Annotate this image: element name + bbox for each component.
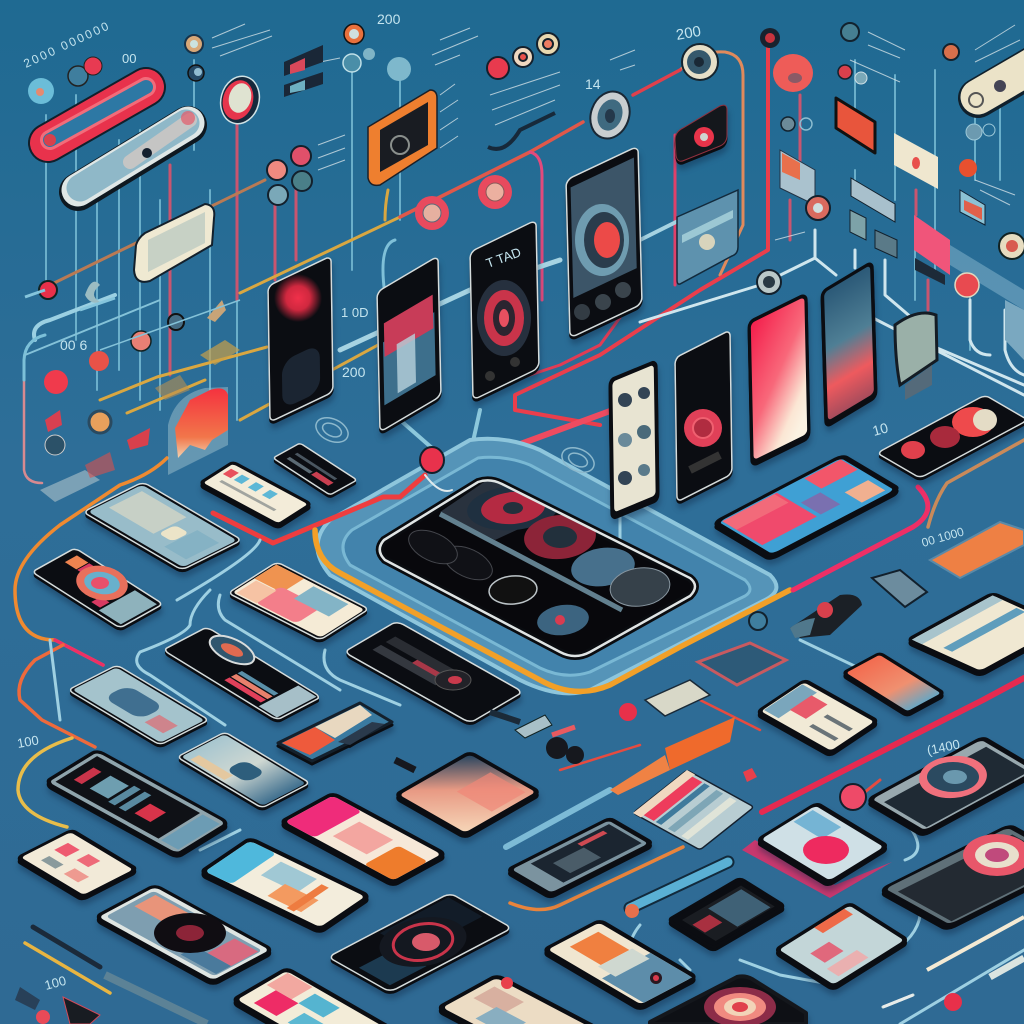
pin: red marker bbox=[420, 447, 444, 473]
icon: dark dot and red badge bbox=[760, 28, 813, 92]
flat phone: pink tiles bbox=[280, 793, 446, 883]
icon: red tablet bbox=[836, 98, 875, 153]
flat phone: black ring bbox=[328, 893, 512, 992]
icon: top-left dials bbox=[28, 35, 204, 104]
number labels: 14 bbox=[585, 76, 601, 92]
main orange line bbox=[15, 458, 167, 665]
pin: lower right dot bbox=[840, 784, 866, 810]
main tablet bbox=[380, 478, 695, 656]
flat phone: pale tablet bbox=[775, 903, 908, 987]
icon: small gadgets right bbox=[780, 150, 1024, 360]
pink halo under tablet bbox=[742, 840, 892, 898]
flat phone: right big ring upper bbox=[867, 737, 1024, 833]
orange ribbon right bbox=[930, 522, 1024, 578]
icon: stacked thumbnails bbox=[284, 45, 323, 97]
phone: upright black red ring bbox=[675, 330, 732, 502]
icon: red orange flame card bbox=[168, 387, 228, 475]
number labels: 200 bbox=[675, 23, 702, 44]
number labels: 00 6 bbox=[60, 337, 87, 353]
flat phone: gray list bbox=[83, 482, 242, 570]
icon: outline marks bbox=[312, 413, 598, 477]
icon: orange device bbox=[368, 90, 437, 185]
number labels: 200 bbox=[377, 11, 401, 27]
icon: cluster of four dots bbox=[267, 146, 312, 205]
icon: cream note bbox=[894, 133, 938, 189]
icon: top dots bbox=[343, 24, 411, 81]
red-framed screen small bbox=[698, 643, 786, 685]
flat phone: cream notes bbox=[200, 462, 311, 525]
heading: top left caption: 2000 000000 bbox=[21, 18, 113, 71]
icon: cream pill top right bbox=[969, 61, 1024, 107]
bottom stylus and pins bbox=[15, 904, 1024, 1024]
number labels: 10 bbox=[871, 419, 890, 439]
number labels: 1 0D bbox=[341, 305, 368, 320]
flat phone: black small center bbox=[668, 878, 785, 948]
icon: ring top of phones bbox=[757, 270, 781, 294]
flat phone: black lens bbox=[32, 548, 163, 628]
flat phone: black red lines bbox=[163, 627, 321, 720]
pale card small bbox=[645, 680, 710, 716]
phone: upright gray red bbox=[822, 262, 876, 424]
icon: smartwatch bbox=[895, 313, 937, 400]
icon: top ring bbox=[682, 44, 718, 80]
flat phone: black bottom rings bbox=[650, 976, 806, 1024]
icon: ring dial bbox=[584, 86, 636, 144]
number labels: 00 bbox=[122, 51, 136, 66]
number labels: 100 bbox=[43, 973, 68, 993]
icon: gray pill bbox=[78, 111, 195, 192]
flat phone: pink bottom bbox=[232, 968, 400, 1024]
flat phone: cream blue orange bbox=[200, 838, 370, 930]
flat phone: cream bottom bbox=[437, 975, 615, 1024]
flat phone: pink blob bbox=[757, 803, 888, 883]
icon: phone cable plug bbox=[490, 712, 520, 722]
flat phone: orange red bbox=[843, 653, 944, 713]
flat phone: black small bbox=[273, 443, 357, 495]
flat phone: cream document bbox=[757, 680, 878, 753]
flat phone: cream red bbox=[17, 830, 137, 897]
icon: left mid gadgets bbox=[25, 281, 240, 502]
flat phone: black long list bbox=[45, 750, 229, 855]
flat phone: multicolor bbox=[713, 455, 900, 557]
flat phone: dark street bbox=[507, 818, 653, 895]
icon: red pill bbox=[44, 87, 146, 146]
phone: upright waves bbox=[377, 256, 441, 432]
flat phone: orange gradient bbox=[228, 562, 369, 640]
flat phone: orange table bbox=[395, 752, 540, 835]
icon: cream card bbox=[134, 204, 214, 282]
flat phone: cream widgets bbox=[907, 593, 1024, 673]
platform under tablet bbox=[318, 439, 776, 693]
flat phone: right big ring lower bbox=[880, 825, 1024, 927]
flat phone: gray illustration bbox=[68, 665, 209, 745]
phone: upright app list bbox=[610, 361, 658, 516]
icon: row of dots top centre bbox=[487, 33, 559, 79]
icon: red swirl badges bbox=[415, 175, 512, 230]
phone: upright big lens bbox=[566, 146, 642, 338]
number labels: 200 bbox=[342, 364, 366, 380]
orange ribbon centre bbox=[610, 717, 735, 795]
phone: upright red glow bbox=[268, 256, 333, 422]
icon: right side widgets bbox=[781, 23, 995, 177]
number labels: (1400 bbox=[926, 736, 961, 758]
flat phone: orange blue small bbox=[278, 703, 392, 761]
flat phone: red band card bbox=[633, 770, 754, 850]
phone: upright concentric: T TAD bbox=[484, 244, 523, 271]
flat phone: black right bbox=[877, 395, 1024, 478]
flat phone: swirl sky bbox=[177, 732, 310, 808]
icon: red ring dial bbox=[215, 72, 265, 128]
phone: upright concentric bbox=[470, 220, 539, 400]
phone: upright pink gradient bbox=[749, 294, 809, 463]
flat phone: black with stripes bbox=[344, 621, 523, 723]
icon: earbuds link bbox=[488, 113, 555, 149]
flat phone: orange cream bottom bbox=[543, 920, 697, 1007]
caption strokes bbox=[212, 24, 1020, 240]
gadgets cluster bbox=[395, 570, 927, 782]
flat phone: dark abstract bbox=[95, 885, 273, 982]
number labels: 100 bbox=[16, 732, 40, 751]
number labels: 00 1000 bbox=[920, 524, 966, 550]
phone: upright slim upper bbox=[675, 105, 738, 284]
